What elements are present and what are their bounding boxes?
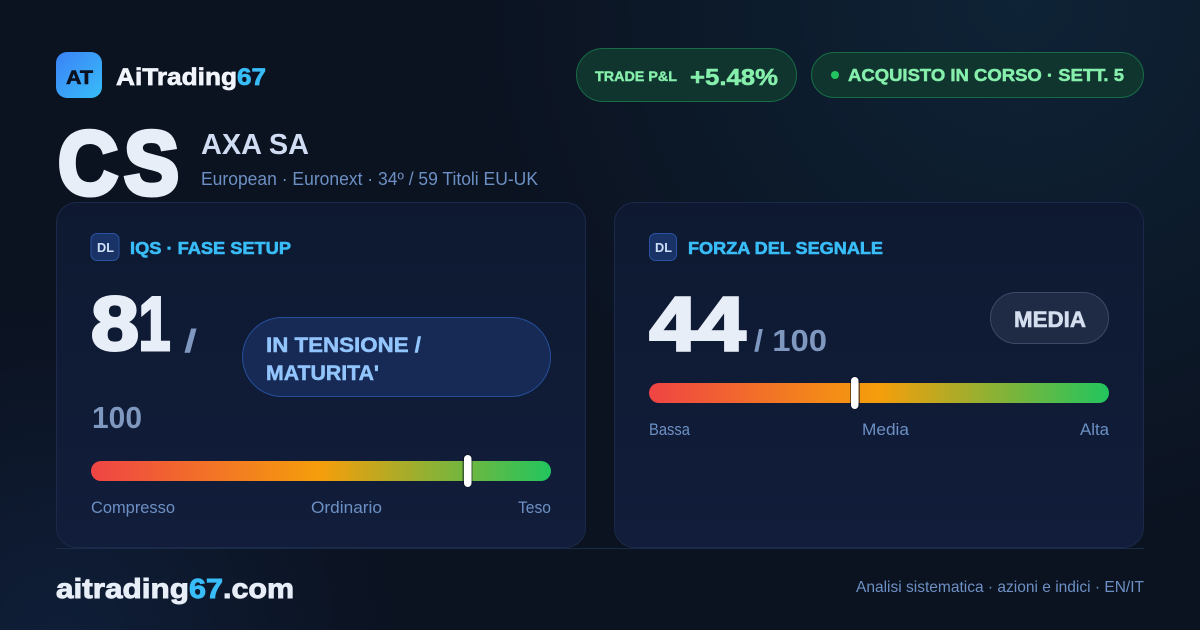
- ticker: C: [58, 114, 118, 214]
- logo badge: [56, 52, 102, 98]
- score value: 4: [650, 282, 698, 367]
- company details: European · Euronext · 34º / 59 Titoli EU-UK: [201, 169, 538, 189]
- panel heading: FORZA DEL SEGNALE: [688, 238, 883, 258]
- score scale: / 100: [754, 323, 827, 358]
- status pill: MATURITA': [266, 362, 379, 385]
- gauge labels: Compresso: [91, 499, 175, 517]
- icon: DL: DL: [97, 240, 114, 255]
- score value: 1: [138, 282, 170, 367]
- status pill: [990, 292, 1108, 344]
- gauge labels: Alta: [1080, 421, 1110, 439]
- score scale: 100: [92, 400, 142, 435]
- gauge bar: [649, 376, 1109, 410]
- footer website: 67: [189, 573, 223, 604]
- ticker: [58, 114, 179, 214]
- panel: signal strength: [614, 202, 1144, 548]
- status pill: [242, 318, 550, 396]
- icon: DL: [650, 234, 676, 260]
- status pill: MEDIA: [1014, 307, 1086, 332]
- footer website: [56, 573, 294, 604]
- logo badge: AT: [66, 68, 93, 89]
- score scale: /: [184, 323, 197, 359]
- icon: DL: DL: [655, 240, 672, 255]
- score value: [91, 282, 170, 367]
- footer website: aitrading: [56, 573, 189, 604]
- company name: AXA SA: [201, 129, 309, 161]
- gauge labels: Bassa: [649, 421, 691, 439]
- gauge labels: [649, 421, 1110, 439]
- badge: buying in progress: ACQUISTO IN CORSO · SETT. 5: [848, 65, 1124, 85]
- footer website: .com: [223, 573, 294, 604]
- gauge labels: Teso: [518, 499, 551, 517]
- ticker: S: [124, 114, 179, 214]
- gauge bar: [91, 454, 551, 488]
- badge: trade P&L: [576, 48, 796, 102]
- footer note: Analisi sistematica · azioni e indici · EN/IT: [856, 579, 1144, 596]
- panel: IQS setup phase: [56, 202, 586, 548]
- gauge labels: [91, 499, 551, 517]
- brand name: 67: [237, 64, 266, 91]
- score value: 8: [91, 282, 139, 367]
- score value: 4: [698, 282, 746, 367]
- score scale: [92, 323, 197, 435]
- gauge labels: Media: [862, 421, 910, 439]
- score value: [650, 282, 746, 367]
- status pill: IN TENSIONE /: [266, 334, 421, 357]
- icon: DL: [91, 234, 119, 260]
- panel heading: IQS · FASE SETUP: [130, 238, 291, 258]
- badge: trade P&L: +5.48%: [690, 64, 778, 90]
- badge: buying in progress: [812, 52, 1144, 98]
- badge: trade P&L: TRADE P&L: [595, 69, 677, 84]
- gauge labels: Ordinario: [311, 499, 382, 517]
- brand name: AiTrading: [116, 64, 237, 91]
